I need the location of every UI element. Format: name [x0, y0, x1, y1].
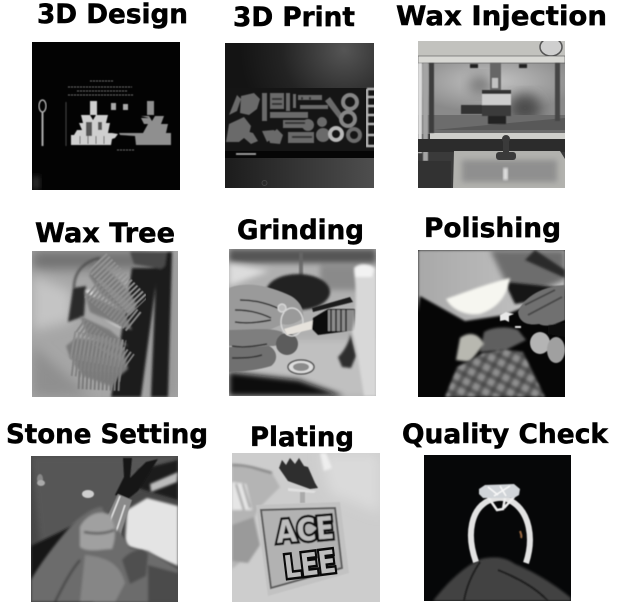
heading: Stone Setting: Stone Setting	[6, 419, 208, 450]
press piston and mould	[461, 63, 527, 124]
panel: wax tree photo	[32, 251, 178, 397]
panel: wax injection machine	[418, 38, 565, 188]
heading: Plating: Plating	[250, 422, 354, 453]
pendant lettering: ACE: ACE	[275, 510, 336, 551]
pale finger	[338, 264, 376, 396]
light pendant drawing	[71, 101, 118, 145]
ring shaped parts	[330, 95, 360, 141]
panel: polishing photo	[418, 250, 565, 397]
panel: 3D design CAD drawing	[32, 42, 180, 190]
part gaps	[272, 97, 312, 137]
machine columns	[418, 63, 560, 161]
panel: plating photo	[232, 453, 380, 602]
heading: 3D Print: 3D Print	[233, 2, 355, 33]
panel: stone setting photo	[31, 456, 178, 602]
panel: grinding photo	[229, 249, 376, 396]
ring being ground	[278, 304, 303, 336]
working hand	[229, 285, 303, 372]
grinding tool	[284, 297, 356, 335]
bright polishing wheel	[446, 278, 510, 314]
heading: Polishing: Polishing	[424, 213, 561, 244]
icon: chain loop drawing	[39, 100, 46, 146]
printed resin parts	[226, 93, 344, 144]
loose stones	[37, 474, 94, 498]
grey pendant drawing	[119, 101, 171, 145]
crown bail	[279, 458, 318, 503]
clay ball	[276, 333, 298, 355]
heading: Wax Injection: Wax Injection	[396, 1, 607, 32]
dark stand bars	[111, 252, 172, 397]
fingers	[232, 465, 280, 569]
pendant lettering: LEE: LEE	[282, 544, 338, 586]
panel: 3D printed models	[225, 43, 375, 188]
injection nozzle	[496, 135, 516, 160]
thumb	[480, 328, 526, 352]
panel: quality check photo	[424, 455, 571, 601]
knit glove fingers	[518, 285, 565, 363]
ladder shaped part	[367, 89, 375, 146]
jewel piece	[500, 312, 521, 328]
diamond setting	[479, 484, 520, 510]
wax tree branches	[72, 262, 139, 382]
heading: Grinding: Grinding	[237, 215, 364, 246]
wax ring on bench	[288, 360, 314, 374]
wax tree body	[66, 261, 137, 386]
translucent wax tray	[453, 151, 565, 188]
hand holding pliers	[31, 507, 178, 602]
dark cabinet	[422, 161, 429, 162]
dark bench disc	[266, 274, 330, 310]
tiny dimension notes	[66, 81, 134, 150]
ring band	[471, 498, 530, 563]
grey face area	[418, 250, 565, 321]
heading: Quality Check: Quality Check	[402, 419, 609, 450]
pendant plate	[256, 502, 349, 596]
white paper	[125, 498, 178, 566]
gloved fingertip	[433, 557, 571, 601]
checked glove	[445, 349, 545, 397]
pliers	[100, 458, 158, 552]
small stud drawings	[111, 103, 128, 110]
heading: Wax Tree: Wax Tree	[35, 218, 175, 249]
